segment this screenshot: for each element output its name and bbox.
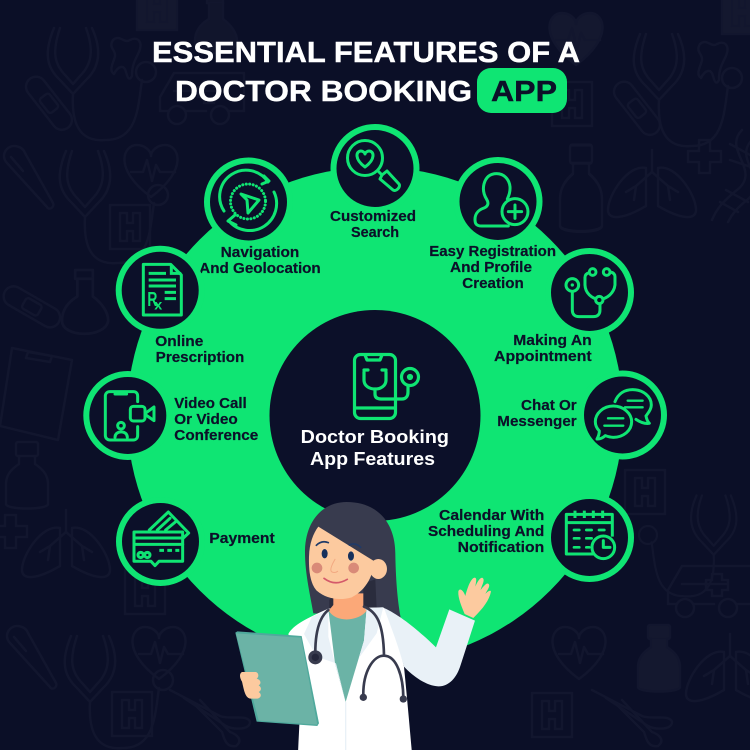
label: Navigation <box>221 245 299 261</box>
coat lapels <box>304 607 383 702</box>
feature: chat or messenger <box>497 374 664 456</box>
label <box>497 398 577 430</box>
icon: speech bubbles <box>595 390 651 439</box>
icon: stethoscope <box>566 269 615 317</box>
label: And Geolocation <box>199 261 321 277</box>
icon: prescription document: x <box>154 296 163 312</box>
label: Appointment <box>494 349 592 365</box>
face <box>309 527 373 599</box>
feature: easy registration and profile creation <box>429 160 556 292</box>
central label <box>301 426 449 469</box>
icon: prescription document <box>143 264 181 315</box>
shirt <box>328 609 367 702</box>
neck shadow <box>329 579 377 609</box>
icon badge <box>548 496 631 579</box>
coat sleeve <box>384 608 475 686</box>
label: Chat Or <box>521 398 577 414</box>
label: Making An <box>513 333 592 349</box>
label <box>429 244 556 292</box>
feature: navigation and geolocation <box>199 160 321 277</box>
label: Customized <box>330 209 416 225</box>
coat body <box>288 607 412 750</box>
central label: Doctor Booking <box>301 426 449 447</box>
label: Messenger <box>497 414 577 430</box>
doctor illustration <box>235 502 491 750</box>
label <box>494 333 592 365</box>
label <box>428 508 544 556</box>
icon: user with plus <box>475 174 528 226</box>
feature: calendar with scheduling and notification <box>428 496 631 579</box>
label: Calendar With <box>439 508 544 524</box>
label: Scheduling And <box>428 524 544 540</box>
label: Creation <box>462 276 524 292</box>
label: Search <box>351 225 399 241</box>
icon badge <box>456 160 540 243</box>
cheeks <box>312 563 359 573</box>
icon badge <box>207 160 290 244</box>
central label: App Features <box>310 448 435 469</box>
nose <box>331 559 338 573</box>
label: And Profile <box>450 260 532 276</box>
holding hand <box>240 672 261 699</box>
feature: making an appointment <box>494 251 631 365</box>
feature: customized search <box>330 127 416 241</box>
icon: magnifier with heart <box>348 140 399 190</box>
stethoscope <box>315 607 403 698</box>
label: Prescription <box>156 350 244 366</box>
title <box>152 37 580 113</box>
label: Easy Registration <box>429 244 556 260</box>
label <box>330 209 416 241</box>
eyes <box>322 549 354 561</box>
green hub disc <box>127 167 623 663</box>
central circle: doctor booking app features <box>270 310 480 521</box>
waving hand <box>458 578 491 618</box>
label <box>199 245 321 277</box>
icon badge <box>334 127 416 210</box>
icon badge <box>119 500 202 583</box>
label: Or Video <box>174 412 238 428</box>
mouth <box>324 578 347 583</box>
eyebrows <box>316 542 361 547</box>
clipboard <box>235 631 319 726</box>
title highlight pill: APP <box>477 68 567 113</box>
icon: compass arrow with rotating arrows <box>220 170 277 231</box>
title: ESSENTIAL FEATURES OF A <box>152 37 580 69</box>
icon: calendar with clock <box>566 511 615 559</box>
stethoscope chest piece <box>308 650 322 664</box>
stethoscope tips <box>360 694 407 703</box>
label: Notification <box>458 540 544 556</box>
title: DOCTOR BOOKING <box>175 76 472 108</box>
label: Online <box>155 334 203 350</box>
icon: phone with stethoscope <box>354 354 418 418</box>
icon badge <box>581 374 664 456</box>
label: Payment <box>209 531 275 547</box>
hair <box>305 502 401 617</box>
label: Conference <box>174 428 258 444</box>
ear <box>370 559 387 579</box>
icon badge <box>86 374 169 457</box>
icon: phone with video camera <box>105 392 154 440</box>
neck <box>329 593 367 619</box>
label <box>155 334 244 366</box>
label <box>174 396 258 444</box>
icon badge <box>548 251 631 334</box>
icon badge <box>119 249 202 332</box>
label: Video Call <box>174 396 247 412</box>
feature: online prescription <box>119 249 244 366</box>
feature: video call or video conference <box>86 374 258 457</box>
title highlight pill: APP: APP <box>491 76 557 108</box>
icon: credit cards <box>134 512 189 566</box>
feature: payment <box>119 500 275 583</box>
coat centre seam <box>344 702 348 750</box>
icon: prescription document: R <box>147 289 158 311</box>
